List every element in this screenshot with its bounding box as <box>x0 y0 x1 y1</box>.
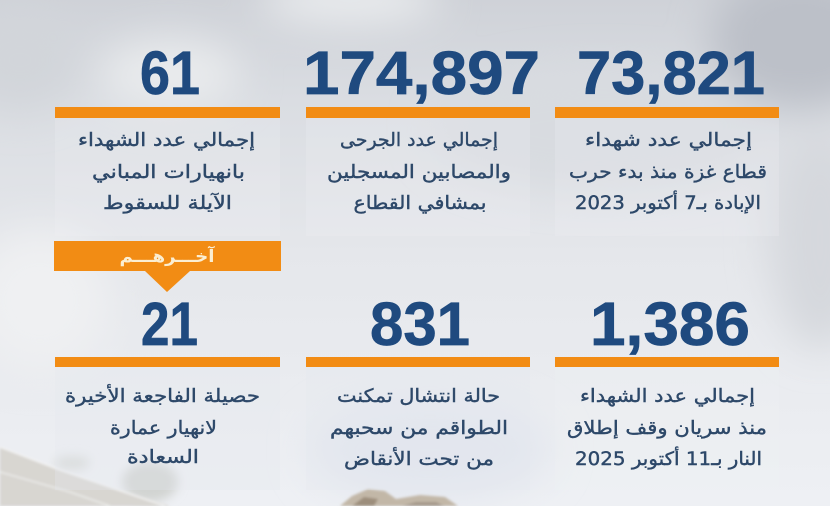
orange bar <box>306 107 530 118</box>
panel backing <box>55 118 280 236</box>
description <box>569 130 767 214</box>
description: بانهيارات المباني <box>92 162 245 183</box>
description: منذ سريان وقف إطلاق <box>567 418 767 439</box>
number: 1,386 <box>590 290 750 358</box>
description: والمصابين المسجلين <box>327 162 511 183</box>
orange bar <box>555 107 779 118</box>
description <box>78 130 255 214</box>
panel backing <box>555 367 779 490</box>
panel backing <box>55 367 280 490</box>
description: إجمالي عدد الشهداء <box>580 386 755 407</box>
panel: total wounded registered in hospitals <box>303 39 540 236</box>
orange bar <box>55 357 280 367</box>
number: 73,821 <box>577 39 765 107</box>
panel backing <box>555 118 779 236</box>
description: الآيلة للسقوط <box>103 192 232 214</box>
description <box>65 384 260 468</box>
callout banner: the latest of them: آخـــرهـــم <box>120 245 216 267</box>
number: 174,897 <box>303 39 540 107</box>
panel: toll of the latest tragedy <box>55 290 280 490</box>
description: من تحت الأنقاض <box>344 447 494 470</box>
description: إجمالي عدد الشهداء <box>78 130 255 151</box>
description: الإبادة بـ7 أكتوبر 2023 <box>575 190 761 214</box>
panel backing <box>306 118 530 236</box>
description <box>330 386 508 470</box>
description: لانهيار عمارة <box>110 418 217 439</box>
panel backing <box>306 367 530 490</box>
description: قطاع غزة منذ بدء حرب <box>569 162 767 183</box>
description: إجمالي عدد شهداء <box>585 130 752 151</box>
description: الطواقم من سحبهم <box>330 418 508 439</box>
callout banner: the latest of them <box>54 241 281 292</box>
description: بمشافي القطاع <box>354 193 486 214</box>
description: حالة انتشال تمكنت <box>337 386 500 407</box>
number: 61 <box>140 39 200 107</box>
description <box>567 386 767 470</box>
orange bar <box>55 107 280 118</box>
orange bar <box>555 357 779 367</box>
panel: total martyrs since ceasefire <box>555 290 779 490</box>
number: 831 <box>370 290 470 358</box>
description <box>327 130 511 214</box>
description: إجمالي عدد الجرحى <box>340 130 498 151</box>
description: النار بـ11 أكتوبر 2025 <box>575 446 762 470</box>
description: حصيلة الفاجعة الأخيرة <box>65 384 260 407</box>
description: السعادة <box>127 447 199 468</box>
panel: total martyrs in Gaza since 7 October 2023 <box>555 39 779 236</box>
number: 21 <box>141 290 198 358</box>
orange bar <box>306 357 530 367</box>
panel: recovery cases from under the rubble <box>306 290 530 490</box>
panel: total martyrs from collapsing buildings <box>55 39 280 236</box>
